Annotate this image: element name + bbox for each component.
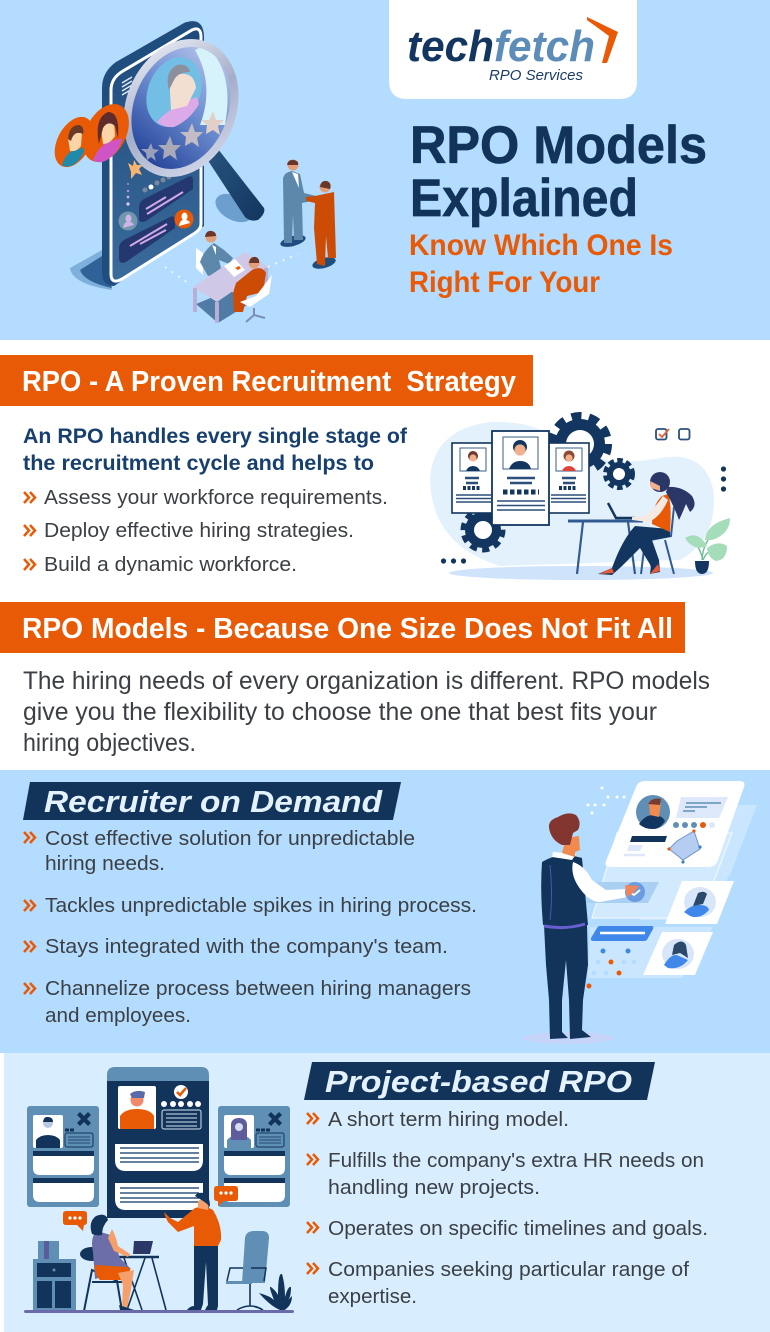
text block: flexibility paragraph: The hiring needs of every organization is different. RPO models	[23, 667, 710, 695]
list: recruiter on demand points: Stays integrated with the company's team.	[45, 935, 448, 958]
list: project-based points: A short term hiring model.	[328, 1108, 569, 1131]
magnifier lens with profile	[124, 39, 238, 177]
panel: hero background	[0, 0, 770, 340]
phone shadow	[70, 250, 112, 290]
dots	[441, 466, 726, 564]
list: project-based points: Companies seeking particular range of	[328, 1258, 689, 1281]
magnifier handle	[207, 149, 264, 228]
subtitle: Right For Your	[409, 266, 600, 299]
heading banner: proven strategy: RPO - A Proven Recruitment Strategy	[22, 366, 516, 398]
title: RPO Models	[410, 116, 707, 175]
panel: project-based background	[0, 1053, 770, 1332]
list: project-based points	[307, 1108, 708, 1308]
list: RPO benefits: Assess your workforce requirements.	[44, 486, 388, 509]
candidate card two	[643, 932, 713, 975]
heading banner: proven strategy	[0, 355, 533, 406]
resume cards	[452, 431, 589, 525]
avatar: small man	[47, 110, 101, 174]
list: RPO benefits: Deploy effective hiring strategies.	[44, 519, 354, 542]
text block: flexibility paragraph: hiring objectives.	[23, 729, 196, 757]
avatar: woman	[74, 96, 138, 170]
main profile card	[606, 781, 744, 867]
list: project-based points: Fulfills the company's extra HR needs on	[328, 1149, 704, 1172]
person: man in blue suit	[279, 160, 316, 249]
phone	[102, 21, 204, 286]
speech bubbles	[63, 1186, 238, 1231]
logo	[389, 0, 637, 99]
logo arrow	[587, 17, 618, 63]
text block: RPO intro: the recruitment cycle and helps to	[23, 452, 374, 475]
title	[410, 116, 707, 228]
center candidate card	[107, 1067, 209, 1218]
heading: recruiter on demand: Recruiter on Demand	[44, 784, 383, 819]
logo subtitle: RPO Services	[489, 68, 583, 84]
title: Explained	[410, 169, 638, 228]
list: recruiter on demand points: Channelize process between hiring managers	[45, 977, 471, 1000]
logo wordmark: techfetch	[407, 22, 595, 71]
list: recruiter on demand points	[24, 827, 477, 1027]
list: project-based points: handling new projects.	[328, 1176, 540, 1199]
text block: RPO intro	[23, 425, 408, 475]
man	[522, 813, 645, 1044]
list: RPO benefits	[24, 486, 388, 576]
panel: white content background	[0, 340, 770, 770]
floor plant	[259, 1274, 292, 1311]
heading: project-based RPO: Project-based RPO	[325, 1064, 632, 1099]
subtitle	[409, 229, 673, 299]
floor line	[24, 1310, 294, 1313]
text block: flexibility paragraph	[23, 667, 710, 757]
plant	[685, 518, 730, 574]
illustration: man using floating interface	[522, 781, 757, 1044]
list: recruiter on demand points: Tackles unpredictable spikes in hiring process.	[45, 894, 477, 917]
man pointing at card	[164, 1193, 221, 1310]
office chair	[226, 1231, 269, 1310]
list: project-based points: expertise.	[328, 1285, 417, 1308]
white particles	[586, 786, 626, 814]
heading banner: one size	[0, 602, 685, 653]
person: man in orange suit	[306, 181, 337, 271]
illustration: phone with magnifier and recruiters	[47, 21, 337, 323]
list: project-based points: Operates on specific timelines and goals.	[328, 1217, 708, 1240]
list: recruiter on demand points: and employees.	[45, 1004, 191, 1027]
dotted connector lines	[165, 254, 298, 283]
panel: recruiter on demand background	[0, 770, 770, 1053]
desk with two people	[193, 231, 272, 323]
subtitle: Know Which One Is	[409, 229, 673, 262]
illustration: woman reviewing resumes	[430, 416, 730, 580]
list: recruiter on demand points: hiring needs.	[45, 852, 165, 875]
list: RPO benefits: Build a dynamic workforce.	[44, 553, 297, 576]
woman at desk	[80, 1215, 166, 1311]
text block: RPO intro: An RPO handles every single stage of	[23, 425, 408, 448]
desk and woman	[568, 472, 695, 575]
gears	[464, 416, 632, 550]
candidate card one	[665, 881, 734, 924]
text block: flexibility paragraph: give you the flexibility to choose the one that best fits your	[23, 698, 657, 726]
blue bar and dots	[586, 926, 653, 988]
heading banner: one size: RPO Models - Because One Size Does Not Fit All	[22, 613, 673, 645]
checkboxes	[656, 429, 690, 440]
filing cabinet	[33, 1241, 76, 1311]
list: recruiter on demand points: Cost effective solution for unpredictable	[45, 827, 415, 850]
illustration: team reviewing candidate profiles	[24, 1067, 294, 1313]
translucent back panels	[586, 805, 757, 978]
left candidate card	[27, 1106, 99, 1207]
right candidate card	[218, 1106, 290, 1207]
